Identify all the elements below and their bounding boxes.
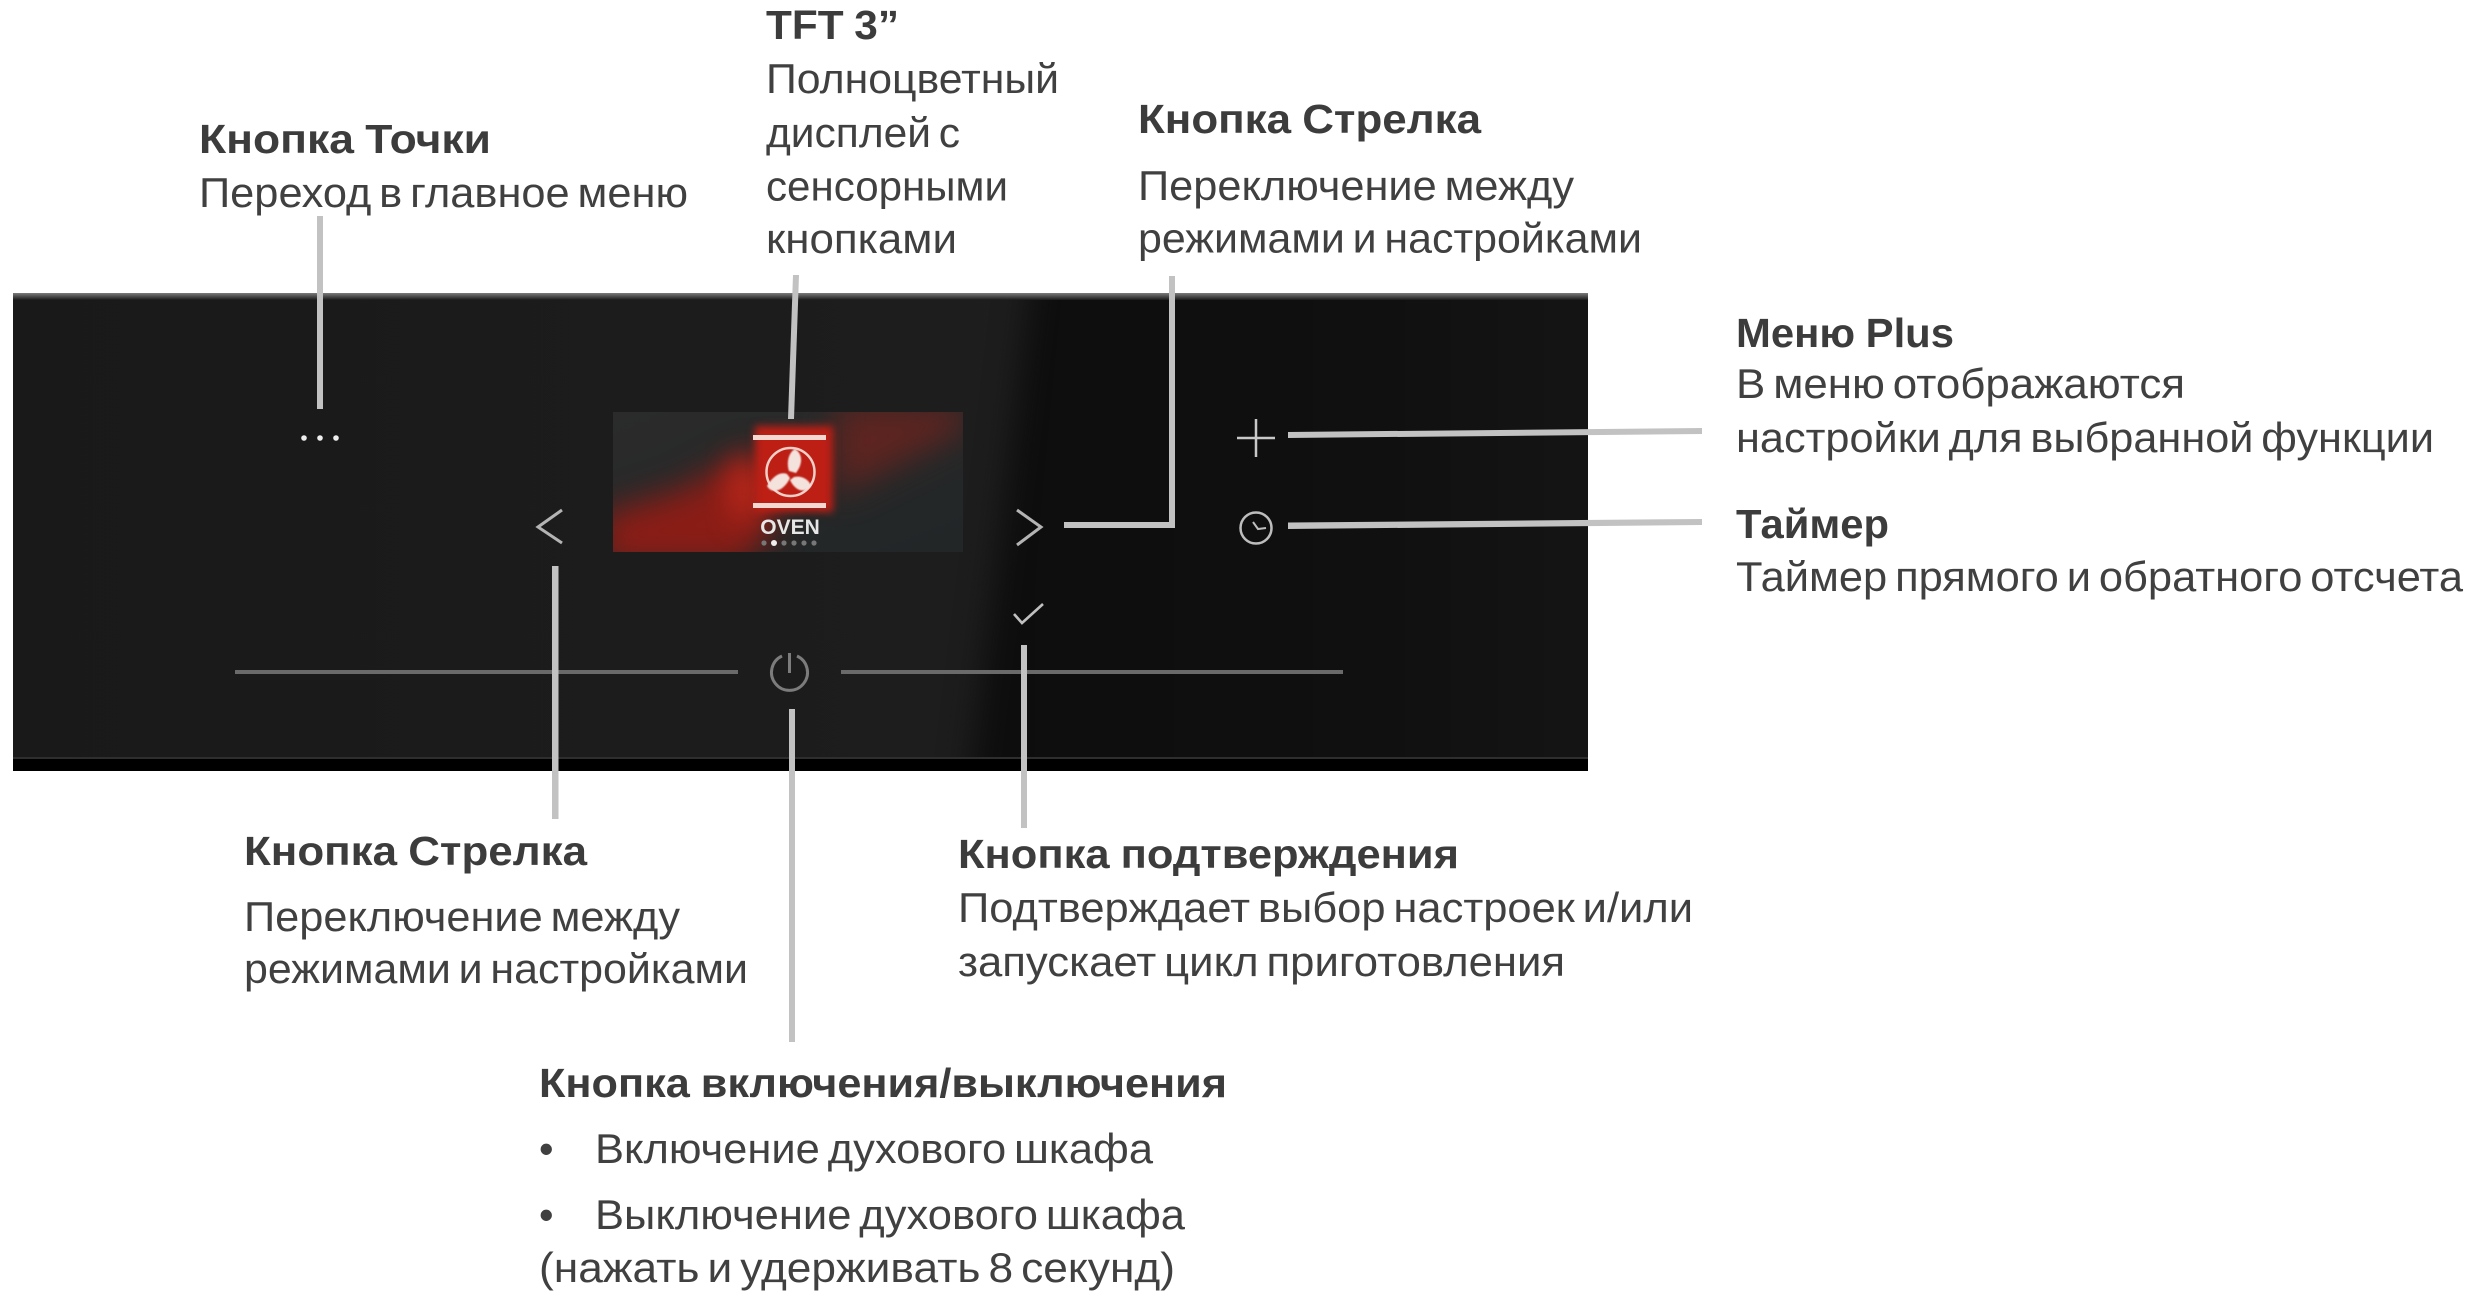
icon: right arrow [1017, 510, 1041, 545]
callout: menu plus: настройки для выбранной функции [1736, 414, 2434, 461]
page indicator dots [761, 540, 817, 546]
leader line: left arrow [552, 566, 558, 819]
callout: confirm button: Кнопка подтверждения [958, 831, 1459, 877]
callout: left arrow button [244, 828, 748, 992]
icon: check mark [1014, 604, 1043, 623]
callout: dots button: Кнопка Точки [199, 116, 491, 162]
callout: timer: Таймер [1736, 501, 1889, 547]
callout: power button [539, 1060, 1227, 1291]
callout: left arrow button: режимами и настройками [244, 945, 748, 992]
panel: oven control panel [13, 293, 1588, 771]
callout: dots button: Переход в главное меню [199, 169, 688, 216]
leader line: timer [1288, 519, 1702, 529]
icon: left arrow [538, 510, 562, 543]
callout: timer [1736, 501, 2464, 600]
callout: confirm button: Подтверждает выбор настроек и/или [958, 884, 1693, 931]
callout: right arrow button: режимами и настройками [1138, 214, 1642, 262]
callout: TFT display: Полноцветный [766, 55, 1059, 102]
callout: power button: (нажать и удерживать 8 секунд) [539, 1244, 1175, 1291]
callout: power button: Включение духового шкафа [595, 1125, 1154, 1172]
leader line: power button [789, 709, 795, 1042]
callout: menu plus: Меню Plus [1736, 310, 1954, 356]
leader line: dots button [317, 216, 323, 409]
callout: power button: Кнопка включения/выключения [539, 1060, 1227, 1106]
leader line: TFT display [788, 275, 799, 419]
icon: power button [772, 653, 808, 690]
leader line: confirm button [1021, 645, 1027, 828]
callout: left arrow button: Кнопка Стрелка [244, 828, 588, 874]
slider: right line [841, 670, 1343, 674]
callout: power button: Выключение духового шкафа [595, 1191, 1186, 1238]
callout: power button: • [539, 1191, 554, 1238]
callout: right arrow button: Кнопка Стрелка [1138, 96, 1482, 142]
icon: three dots [301, 435, 339, 441]
callout: confirm button: запускает цикл приготовления [958, 938, 1565, 985]
callout: TFT display: кнопками [766, 215, 957, 262]
display: TFT screen [613, 412, 963, 552]
callout: TFT display [766, 2, 1059, 262]
callout: timer: Таймер прямого и обратного отсчета [1736, 553, 2464, 600]
callout: TFT display: TFT 3” [766, 2, 899, 48]
icon: red oven fan [753, 426, 833, 512]
label: OVEN: OVEN [760, 516, 820, 539]
callout: TFT display: сенсорными [766, 162, 1008, 210]
leader line: right arrow [1064, 276, 1175, 528]
slider: left line [235, 670, 738, 674]
callout: right arrow button: Переключение между [1138, 162, 1574, 209]
callout: TFT display: дисплей с [766, 109, 960, 156]
callout: left arrow button: Переключение между [244, 893, 680, 940]
callout: confirm button [958, 831, 1693, 985]
callout: right arrow button [1138, 96, 1642, 262]
callout: dots button [199, 116, 688, 216]
callout: power button: • [539, 1125, 554, 1172]
callout: menu plus [1736, 310, 2434, 461]
icon: clock [1240, 512, 1272, 544]
callout: menu plus: В меню отображаются [1736, 360, 2185, 407]
leader line: menu plus [1288, 428, 1702, 438]
icon: plus [1237, 419, 1275, 457]
